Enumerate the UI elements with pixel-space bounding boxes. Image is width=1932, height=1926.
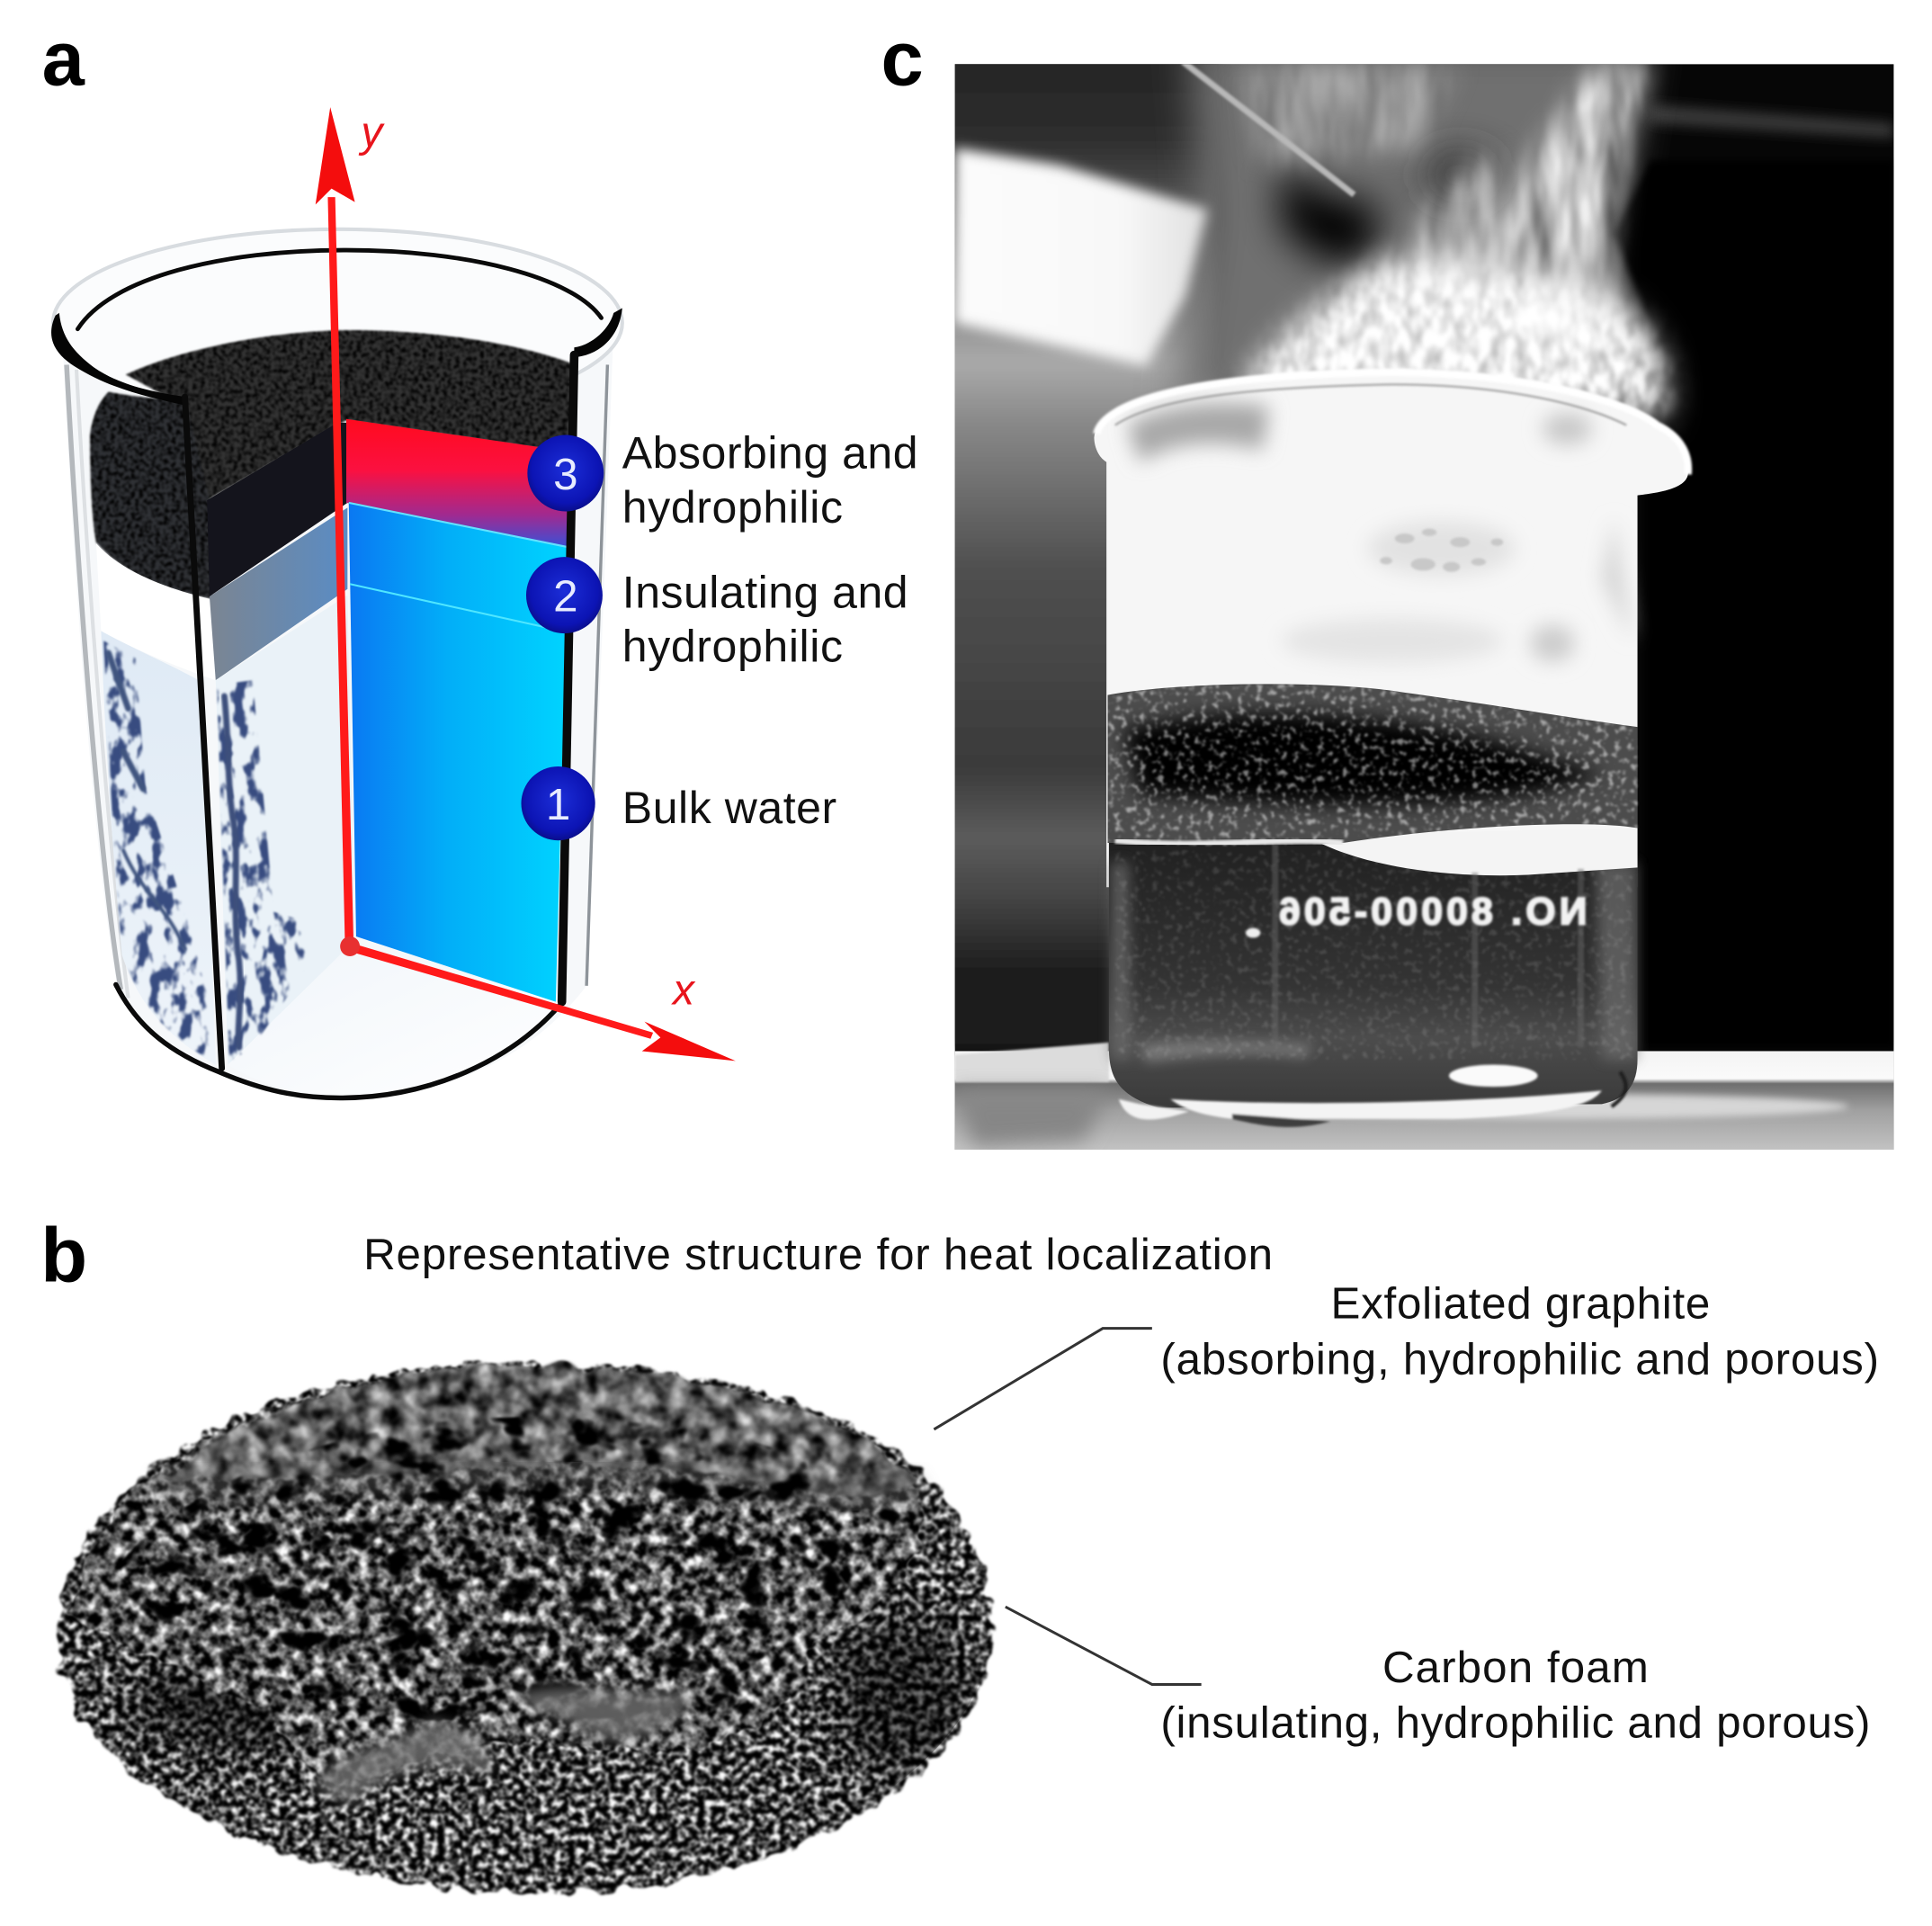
y axis arrow (316, 107, 385, 947)
marker 2: 2 (553, 571, 578, 621)
beaker white base (1119, 1065, 1626, 1127)
absorbing layer, left cut face (207, 423, 347, 596)
marker 1: 1 (546, 780, 570, 829)
bottom disc of the beaker (228, 940, 562, 1096)
water cut face with flakes (216, 596, 355, 1065)
white band through glass (96, 543, 216, 680)
smooth gray top rim (160, 1365, 918, 1493)
marker 3 (527, 435, 604, 511)
graphite flake layer (72, 1371, 924, 1781)
white wedge under foam (1306, 829, 1638, 875)
water seen through glass with flakes (101, 631, 216, 1065)
blue water column face (349, 503, 568, 1002)
printed beaker marking: NO. 80000-506 (1279, 890, 1587, 932)
black cracks between flakes (99, 1417, 899, 1725)
glass rod (1183, 61, 1354, 194)
label: insulating and hydrophilic: hydrophilic (622, 622, 843, 672)
black right backdrop mask (1614, 160, 1893, 1047)
bright panel behind beaker (955, 148, 1207, 366)
leader line: exfoliated graphite (934, 1329, 1152, 1429)
dark foam shadows (123, 1614, 967, 1775)
panel label a: a (42, 16, 85, 102)
steam cloud above the beaker (1239, 261, 1668, 419)
beaker body (1094, 372, 1688, 887)
panel: a, beaker cross-section diagram (42, 16, 918, 1097)
foam layer (1108, 684, 1638, 846)
label: carbon foam: Carbon foam (1382, 1643, 1649, 1692)
sample photo: carbon foam disc with graphite (58, 1363, 992, 1894)
photo background (955, 64, 1893, 1150)
label: absorbing and hydrophilic: hydrophilic (622, 482, 843, 533)
marker 1 (522, 766, 595, 840)
beaker glass body (53, 229, 622, 1097)
dark pockets in steam (1282, 153, 1495, 265)
carbon foam base (58, 1363, 992, 1894)
gray flake clumps (314, 1688, 691, 1805)
leader line: carbon foam (1006, 1607, 1202, 1685)
x axis arrow: x (671, 966, 696, 1014)
foam top surface (126, 330, 576, 500)
x axis arrow (340, 936, 736, 1061)
steam column (1245, 61, 1645, 345)
transition haze between rim and flakes (160, 1473, 918, 1500)
photo (930, 37, 1893, 1150)
absorbing layer, seen through glass (90, 392, 212, 599)
panel: b, foam and graphite structure (40, 1213, 1879, 1894)
beaker condensation details (1127, 403, 1632, 663)
insulating layer, left cut face (210, 507, 347, 680)
beaker rim highlight (1096, 372, 1688, 474)
gray middle haze behind steam (1176, 37, 1666, 407)
label: exfoliated graphite: (absorbing, hydrophilic and porous) (1160, 1334, 1879, 1384)
photo left backdrop (930, 40, 1220, 1050)
water under foam (1109, 838, 1638, 1107)
red absorbing layer face (346, 419, 574, 547)
marker 2 (526, 557, 603, 633)
beaker black rim and cut edges (51, 250, 622, 1097)
label: exfoliated graphite (1160, 1279, 1879, 1384)
table surface (955, 1043, 1893, 1150)
water grain (1115, 850, 1632, 1060)
lighter layer reflections inside water (1112, 863, 1636, 1062)
label: insulating and hydrophilic: Insulating and (622, 567, 908, 617)
heading: representative structure: Representative structure for heat localization (363, 1230, 1273, 1279)
label: carbon foam (1160, 1643, 1870, 1747)
label: carbon foam: (insulating, hydrophilic and porous) (1160, 1698, 1870, 1747)
panel: c, photo of steaming beaker (881, 16, 1893, 1150)
faint streak at top right (1651, 104, 1893, 138)
label: absorbing and hydrophilic (622, 428, 918, 533)
panel label b: b (40, 1213, 87, 1298)
y axis arrow: y (358, 109, 385, 157)
bubbles on the glass (1380, 529, 1503, 572)
label: bulk water: Bulk water (622, 783, 836, 833)
marker 3: 3 (553, 450, 578, 499)
label: insulating and hydrophilic (622, 567, 908, 672)
label: absorbing and hydrophilic: Absorbing and (622, 428, 918, 479)
label: exfoliated graphite: Exfoliated graphite (1330, 1279, 1710, 1329)
panel label c: c (881, 16, 924, 102)
graduated streaks (1275, 714, 1581, 1047)
